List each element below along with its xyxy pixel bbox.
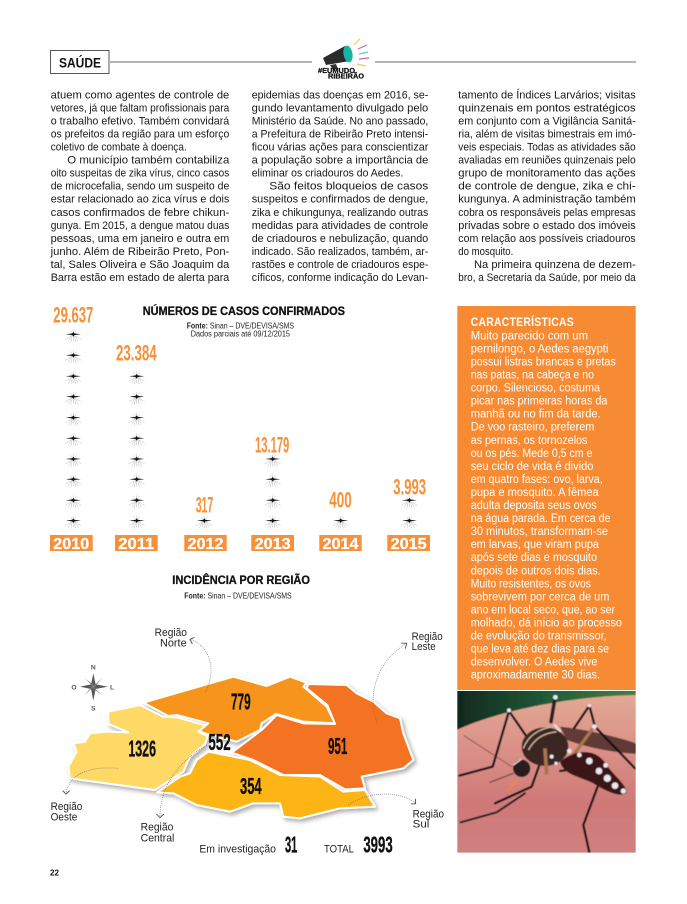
panel body text: depois de outros dois dias. [471, 565, 601, 577]
article text: column 3: com relação aos possíveis criadouros [458, 233, 636, 245]
photo: Aedes aegypti mosquito on skin [453, 688, 640, 855]
article text: column 3: bro, a Secretaria da Saúde, por meio da [458, 272, 636, 284]
article text: column 3: do mosquito. [458, 246, 513, 258]
regional map: 951 [328, 733, 347, 759]
map heading: incidência por região [172, 572, 310, 601]
article text: column 3: em conjunto com a Vigilância Sanitá- [458, 115, 636, 127]
callout: Região Leste: Região [412, 631, 443, 643]
article text: column 2: epidemias das doenças em 2016, se- [252, 89, 429, 101]
region values [128, 688, 347, 799]
panel body text: aproximadamente 30 dias. [471, 670, 600, 682]
article text: column 1: oito suspeitas de zika vírus, cinco casos [51, 168, 230, 180]
callout: Região Central: Central [141, 833, 174, 845]
panel body text: molhado, dá início ao processo [471, 618, 622, 630]
callout: Região Sul: Região [413, 808, 444, 820]
article text: column 3 [458, 88, 636, 284]
panel body text: manhã ou no fim da tarde. [471, 409, 601, 421]
article text: column 2: eliminar os criadouros do Aedes. [252, 168, 403, 180]
panel body text: adulta deposita seus ovos [471, 500, 597, 512]
panel body text: de evolução do transmissor, [471, 630, 607, 642]
panel body text: desenvolver. O Aedes vive [471, 657, 597, 669]
compass rose [71, 665, 114, 713]
article text: column 3: kungunya. A administração também [458, 194, 636, 206]
region: Norte [143, 677, 335, 742]
compass rose: N [91, 665, 96, 672]
regional map [51, 627, 444, 858]
region: Leste [232, 684, 413, 789]
column 2014 [319, 488, 362, 553]
article text: column 3: tamento de Índices Larvários; visitas [458, 88, 636, 101]
article text: column 2: zika e chikungunya, realizando outras [252, 207, 429, 219]
region values: 354 [240, 773, 262, 799]
column 2010 [50, 302, 93, 553]
panel body text: as pernas, os tornozelos [471, 435, 588, 447]
panel body text: corpo. Silencioso, costuma [471, 382, 601, 394]
article text: column 2 [252, 89, 429, 284]
totals: Em investigação [199, 844, 276, 856]
panel body text: em quatro fases: ovo, larva, [471, 474, 603, 486]
callout: Região Norte: Região [155, 627, 187, 639]
section tag: Saúde: SAÚDE [59, 54, 101, 70]
article text: column 2: ficou várias ações para conscientizar [252, 142, 429, 154]
region values: 1326 [128, 736, 156, 762]
article text: column 1: de microcefalia, sendo um suspeito de [51, 181, 229, 193]
panel body text: possui listras brancas e pretas [471, 356, 616, 368]
article text: column 3: Na primeira quinzena de dezem- [474, 259, 636, 271]
article text: column 2: Ministério da Saúde. No ano passado, [252, 115, 428, 127]
panel body text: Muito resistentes, os ovos [471, 578, 591, 590]
chart heading: números de casos confirmados: Dados parciais até 09/12/2015 [191, 330, 290, 339]
region shapes [68, 677, 413, 818]
column 2011 [115, 341, 158, 553]
totals [199, 832, 393, 858]
column 2013: 2013 [255, 536, 291, 553]
panel body text: Muito parecido com um [471, 330, 588, 342]
article text: column 3: quinzenais em pontos estratégicos [458, 102, 636, 114]
article text: column 3: de controle de dengue, zika e chi- [458, 181, 636, 193]
column 2013: 13.179 [255, 432, 289, 457]
panel body text: De voo rasteiro, preferem [471, 422, 594, 434]
compass rose: S [91, 706, 96, 713]
article text: column 1: atuem como agentes de controle de [51, 89, 229, 101]
panel body text: que leva até dez dias para se [471, 644, 609, 656]
column 2010: 29.637 [53, 302, 93, 327]
totals: 31 [285, 832, 297, 858]
article text: column 2: medidas para atividades de controle [252, 220, 428, 232]
column 2010: 2010 [53, 536, 89, 553]
article text: column 3: avaliadas em reuniões quinzenais pelo [458, 155, 636, 167]
article text: column 3: privadas sobre o estado dos imóveis [458, 220, 636, 232]
column 2011: 2011 [118, 536, 154, 553]
article text: column 1: Barra estão em estado de alerta para [51, 272, 230, 284]
article text: column 2: a população sobre a importância de [252, 155, 428, 167]
column 2014: 2014 [322, 536, 359, 553]
article text: column 2: rastões e controle de criadouros espe- [252, 259, 429, 271]
article text: column 1: casos confirmados de febre chikun- [51, 207, 230, 219]
column 2011: 23.384 [116, 341, 157, 366]
chart heading: números de casos confirmados [143, 303, 345, 339]
totals: 3993 [363, 832, 393, 858]
compass rose: O [71, 684, 77, 691]
column 2012: 2012 [188, 536, 224, 553]
column 2012 [184, 492, 227, 553]
article text: column 1: gunya. Em 2015, a dengue matou duas [51, 220, 230, 232]
compass rose: L [110, 684, 114, 691]
article text: column 3: ria, além de visitas bimestrais em imó- [458, 128, 636, 140]
article text: column 1: tal, Sales Oliveira e São Joaquim da [51, 259, 230, 271]
panel body text: na água parada. Em cerca de [471, 513, 610, 525]
article text: column 2: a Prefeitura de Ribeirão Preto intensi- [252, 128, 429, 140]
logo: #EUMUDO Ribeirão megaphone [318, 39, 369, 80]
panel body text: picar nas primeiras horas da [471, 396, 608, 408]
callout: Região Oeste: Região [51, 801, 82, 813]
article text: column 1: o trabalho efetivo. Também convidará [51, 115, 230, 127]
column 2015: 3.993 [393, 474, 426, 499]
panel body text: nas patas, na cabeça e no [471, 370, 594, 382]
article text: column 1: junho. Além de Ribeirão Preto, Pon- [50, 246, 230, 258]
totals: TOTAL [324, 844, 354, 856]
pictogram chart: casos por ano [50, 302, 430, 553]
callout: Região Norte: Norte [160, 638, 187, 650]
region: Sul [157, 752, 375, 818]
logo: #EUMUDO Ribeirão megaphone: RIBEIRÃO [328, 72, 365, 80]
column 2012: 317 [196, 492, 213, 517]
callout: Região Norte [155, 627, 211, 692]
column 2015 [387, 474, 430, 553]
panel body text [471, 330, 622, 682]
article text: column 2: cíficos, conforme indicação do Levan- [252, 272, 429, 284]
region values: 779 [231, 688, 251, 714]
article text: column 1 [50, 89, 230, 284]
article text: column 2: de criadouros e nebulização, quando [252, 233, 428, 245]
article text: column 1: estar relacionado ao zica vírus e dois [51, 194, 230, 206]
panel body text: pernilongo, o Aedes aegypti [471, 343, 608, 355]
article text: column 2: São feitos bloqueios de casos [269, 181, 429, 193]
article text: column 3: grupo de monitoramento das ações [458, 168, 636, 180]
section tag: Saúde [50, 50, 109, 74]
callout: Região Leste [373, 631, 443, 722]
article text: column 2: gundo levantamento divulgado pelo [252, 102, 428, 114]
chart heading: números de casos confirmados: Fonte: Sinan – DVE/DEVISA/SMS [187, 321, 294, 330]
panel body text: sobrevivem por cerca de um [471, 591, 609, 603]
column 2013 [251, 432, 294, 553]
article text: column 1: O município também contabiliza [67, 155, 230, 167]
article text: column 1: vetores, já que faltam profissionais para [51, 102, 230, 114]
panel body text: em larvas, que viram pupa [471, 539, 600, 551]
article text: column 1: coletivo de combate à doença. [51, 142, 187, 154]
region: Oeste [68, 705, 208, 790]
article text: column 3: veis especiais. Todas as atividades são [458, 142, 636, 154]
article text: column 2: suspeitos e confirmados de dengue, [252, 194, 428, 206]
panel: características [457, 306, 636, 690]
page number: 22 [50, 868, 59, 878]
column 2015: 2015 [391, 536, 427, 553]
callout: Região Sul [348, 794, 444, 830]
callout: Região Oeste [51, 768, 118, 824]
logo: #EUMUDO Ribeirão megaphone: #EUMUDO [318, 68, 356, 75]
article text: column 1: pessoas, uma em janeiro e outra em [51, 233, 229, 245]
article text: column 3: cobra os responsáveis pelas empresas [458, 207, 636, 219]
panel body text: seu ciclo de vida é divido [471, 461, 593, 473]
callout: Região Central: Região [141, 822, 173, 834]
column 2014: 400 [329, 488, 352, 513]
chart heading: números de casos confirmados: NÚMEROS DE CASOS CONFIRMADOS [143, 303, 345, 318]
callout: Região Oeste: Oeste [51, 812, 77, 824]
callout: Região Central [141, 745, 207, 845]
article text: column 2: indicado. São realizados, também, ar- [252, 246, 429, 258]
article text: column 1: os prefeitos da região para um esforço [51, 128, 229, 140]
region values: 552 [208, 729, 231, 755]
panel body text: ou os pés. Mede 0,5 cm e [471, 448, 592, 460]
panel heading: CARACTERÍSTICAS [471, 316, 574, 329]
panel body text: pupa e mosquito. A fêmea [471, 487, 599, 499]
callout: Região Leste: Leste [412, 641, 436, 653]
map heading: incidência por região: INCIDÊNCIA POR REGIÃO [172, 572, 310, 587]
panel body text: após sete dias e mosquito [471, 552, 597, 564]
callout: Região Sul: Sul [413, 818, 429, 830]
map heading: incidência por região: Fonte: Sinan – DVE/DEVISA/SMS [184, 592, 292, 601]
panel body text: ano em local seco, que, ao ser [471, 604, 615, 616]
panel body text: 30 minutos, transformam-se [471, 526, 608, 538]
